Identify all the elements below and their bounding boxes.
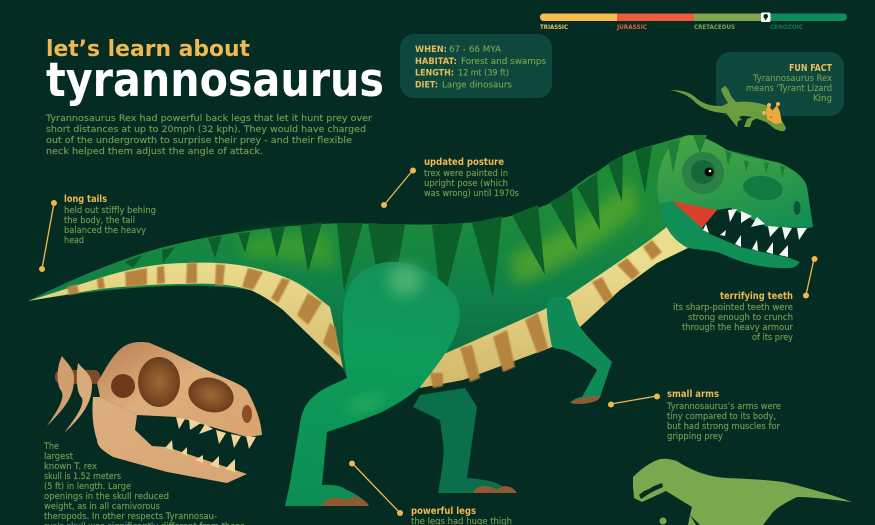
mouth <box>702 208 810 262</box>
lower teeth <box>720 230 788 257</box>
title <box>46 36 384 108</box>
tail glow <box>240 232 335 270</box>
neck vertebrae <box>47 356 100 433</box>
geological timeline: CENOZOIC <box>770 24 804 31</box>
fun fact panel: FUN FACT <box>789 63 832 74</box>
callout: skull: (5 ft) in length. Large <box>44 482 131 492</box>
title: tyrannosaurus <box>46 53 384 108</box>
geological timeline: JURASSIC <box>616 24 648 31</box>
callout: small arms: but had strong muscles for <box>667 422 780 432</box>
far leg <box>413 388 517 493</box>
skull teeth <box>165 417 256 472</box>
callout: skull <box>43 442 245 525</box>
info panel: WHEN: <box>415 45 447 55</box>
fun fact panel: Tyrannosaurus Rex <box>752 74 833 84</box>
callout: long tails: long tails <box>64 194 107 205</box>
tail belly stripe <box>28 263 343 368</box>
geological timeline: CRETACEOUS <box>694 24 735 31</box>
intro paragraph: out of the undergrowth to surprise their prey - and their flexible <box>46 136 352 146</box>
fun fact panel: means 'Tyrant Lizard <box>746 84 832 94</box>
info panel <box>400 34 552 98</box>
callout: long tails: balanced the heavy <box>64 226 147 236</box>
callout: updated posture: trex were painted in <box>424 169 508 179</box>
upper teeth <box>703 209 807 240</box>
skull opening and nostril <box>742 173 784 203</box>
intro paragraph: short distances at up to 20mph (32 kph). They would have charged <box>46 125 366 135</box>
info panel: LENGTH: <box>415 68 454 78</box>
callout: terrifying teeth <box>673 256 818 343</box>
callout: skull: theropods. In other respects Tyrannosau- <box>44 512 217 522</box>
info panel: Forest and swamps <box>461 57 546 67</box>
info panel: DIET: <box>415 80 438 90</box>
info panel: Large dinosaurs <box>442 80 512 90</box>
callout: updated posture <box>381 157 519 208</box>
fun fact panel: King <box>813 94 832 104</box>
callout: small arms: small arms <box>667 389 719 400</box>
callout: skull: The <box>43 442 59 452</box>
callout: long tails <box>39 194 156 272</box>
callout: long tails: held out stiffly behing <box>64 206 156 216</box>
callout: skull: known T. rex <box>44 462 98 472</box>
lower jaw and cheek <box>660 201 800 268</box>
info panel: 12 mt (39 ft) <box>458 68 509 78</box>
callout: terrifying teeth: terrifying teeth <box>720 291 793 302</box>
head stripes <box>668 135 785 178</box>
near leg and thigh <box>285 262 460 506</box>
illustration: tyrannosaurus <box>28 135 813 506</box>
callout: skull: skull is 1.52 meters <box>44 472 121 482</box>
jaw <box>92 397 247 483</box>
callout: small arms: Tyrannosaurus’s arms were <box>666 402 781 412</box>
back glow <box>510 180 640 285</box>
body <box>28 135 813 388</box>
icon: lizard with crown <box>670 86 786 131</box>
cranium <box>97 342 262 437</box>
callout: updated posture: updated posture <box>424 157 504 168</box>
callout: skull: largest <box>44 452 73 462</box>
callout: terrifying teeth: its sharp-pointed teeth were <box>673 303 793 313</box>
callout: skull: openings in the skull reduced <box>44 492 169 502</box>
fun fact panel <box>716 52 844 116</box>
callout: updated posture: was wrong) until 1970s <box>424 189 519 199</box>
intro paragraph: Tyrannosaurus Rex had powerful back legs that let it hunt prey over <box>45 114 372 124</box>
callout: long tails: head <box>64 236 84 246</box>
callout: terrifying teeth: strong enough to crunch <box>688 313 793 323</box>
size silhouette <box>633 459 852 525</box>
back spikes <box>125 146 652 328</box>
callout: long tails: the body, the tail <box>64 216 135 226</box>
callout: updated posture: upright pose (which <box>424 179 508 189</box>
arm <box>547 296 612 404</box>
callout: small arms <box>608 389 781 442</box>
info panel: 67 - 66 MYA <box>449 45 502 55</box>
title: let’s learn about <box>46 36 250 62</box>
intro paragraph <box>45 114 372 157</box>
skull illustration <box>47 342 262 483</box>
head <box>657 135 813 268</box>
intro paragraph: neck helped them adjust the angle of attack. <box>46 147 263 157</box>
callout: terrifying teeth: of its prey <box>752 333 794 343</box>
callout: powerful legs <box>349 460 512 525</box>
callout: small arms: gripping prey <box>667 432 724 442</box>
geological timeline: TRIASSIC <box>540 24 569 31</box>
geological timeline <box>540 12 847 31</box>
callout: terrifying teeth: through the heavy armour <box>682 323 793 333</box>
eye <box>682 152 724 194</box>
callout: skull: weight, as in all carnivorous <box>44 502 160 512</box>
tongue <box>672 201 717 228</box>
info panel: HABITAT: <box>415 57 457 67</box>
skull openings <box>111 357 252 423</box>
callout: small arms: tiny compared to its body, <box>667 412 776 422</box>
callout: powerful legs: powerful legs <box>411 506 476 517</box>
neck and belly stripe <box>420 226 688 388</box>
